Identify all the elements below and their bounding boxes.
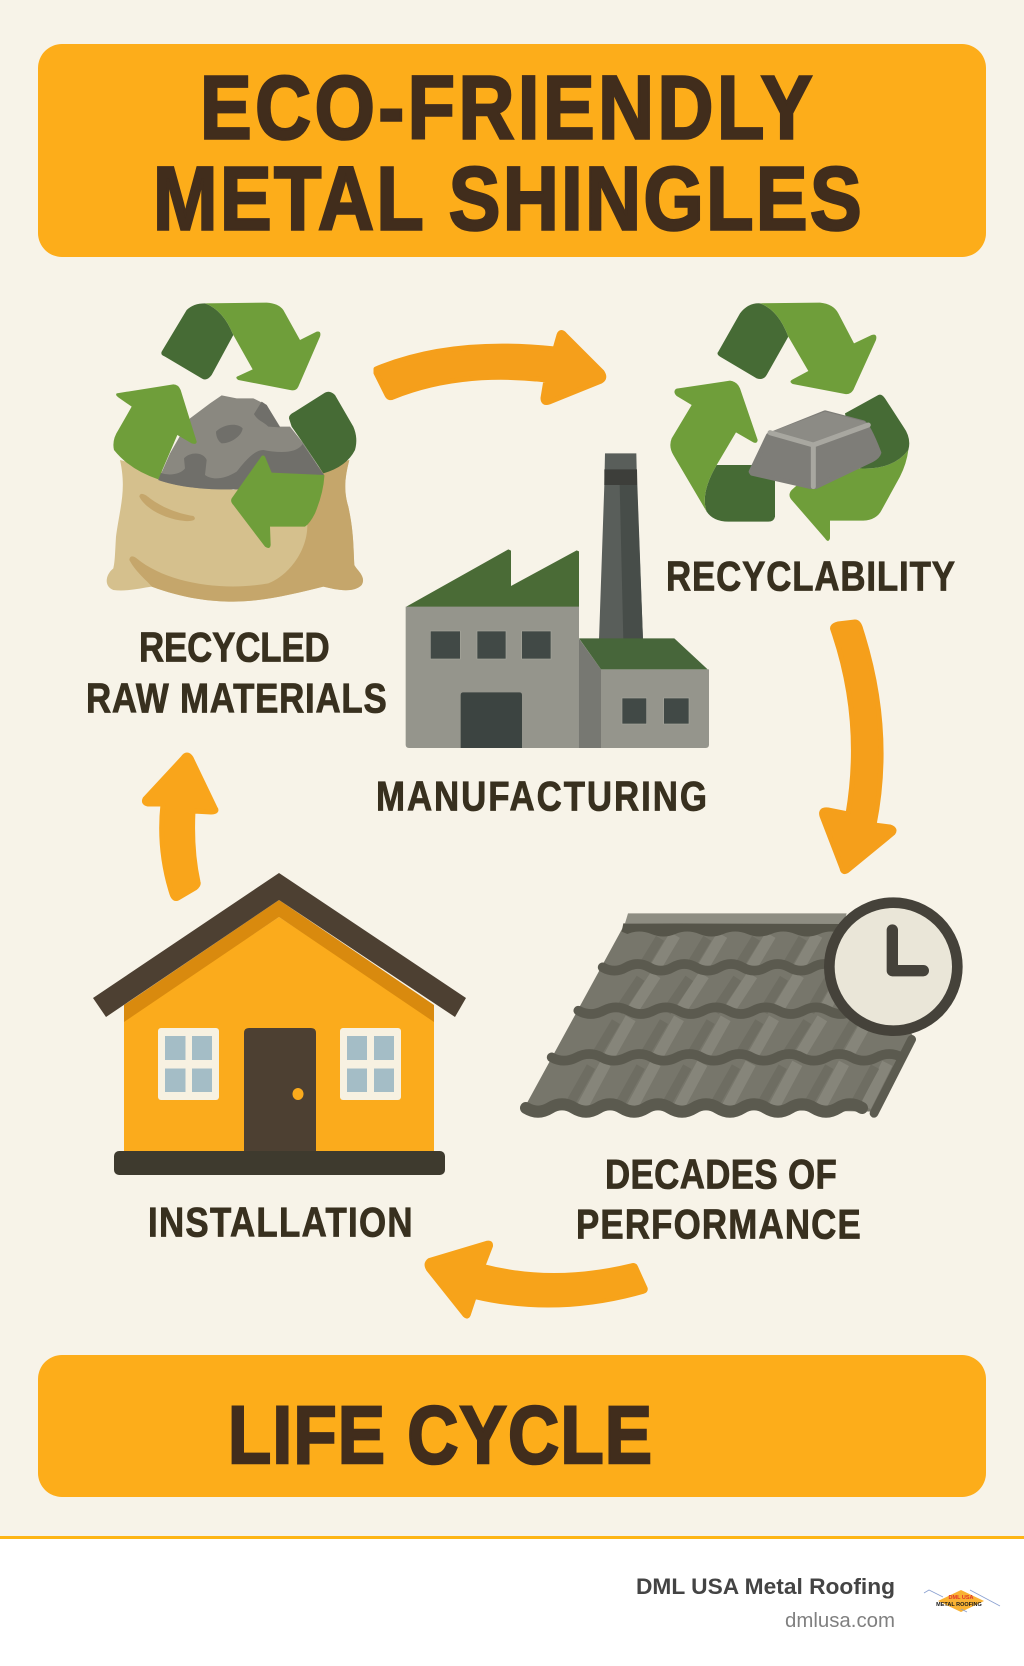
clock (829, 903, 957, 1031)
label: installation: INSTALLATION (148, 1200, 413, 1246)
roof tiles (525, 913, 913, 1113)
label line: decades of: DECADES OF (605, 1152, 837, 1198)
logo: METAL ROOFING (936, 1602, 982, 1608)
icon: metal roof tiles with clock (525, 903, 957, 1113)
arrow: raw materials to recyclability (376, 332, 604, 402)
arrow: performance to installation (427, 1243, 646, 1317)
arrow: installation to raw materials (144, 755, 216, 898)
icon: house installation (93, 873, 466, 1175)
title line 1: ECO-FRIENDLY (200, 57, 812, 158)
arrow: recyclability to decades of performance (822, 622, 894, 872)
website: dmlusa.com (785, 1610, 895, 1632)
icon: sack of recycled raw materials (107, 303, 363, 602)
right window (340, 1028, 401, 1100)
label: recycled raw materials (86, 625, 387, 722)
label line: raw materials: RAW MATERIALS (86, 676, 387, 722)
title line 2: METAL SHINGLES (153, 148, 862, 249)
foundation (114, 1151, 445, 1175)
logo: DML USA (949, 1595, 973, 1601)
logo (924, 1590, 1000, 1612)
label: decades of performance (576, 1152, 861, 1248)
label: manufacturing: MANUFACTURING (376, 774, 707, 820)
icon: recycling symbol with metal ingot (670, 303, 909, 541)
life cycle heading: LIFE CYCLE (228, 1390, 652, 1481)
label line: recycled: RECYCLED (139, 625, 330, 671)
door (244, 1028, 316, 1152)
panel: life cycle banner (38, 1355, 986, 1497)
left window (158, 1028, 219, 1100)
house body (124, 1005, 434, 1151)
label: recyclability: RECYCLABILITY (666, 554, 955, 600)
icon: factory (406, 453, 709, 748)
panel: title banner (38, 44, 986, 257)
footer (0, 1536, 1024, 1666)
brand name: DML USA Metal Roofing (636, 1574, 895, 1599)
label line: performance: PERFORMANCE (576, 1202, 861, 1248)
roof (93, 873, 466, 1017)
